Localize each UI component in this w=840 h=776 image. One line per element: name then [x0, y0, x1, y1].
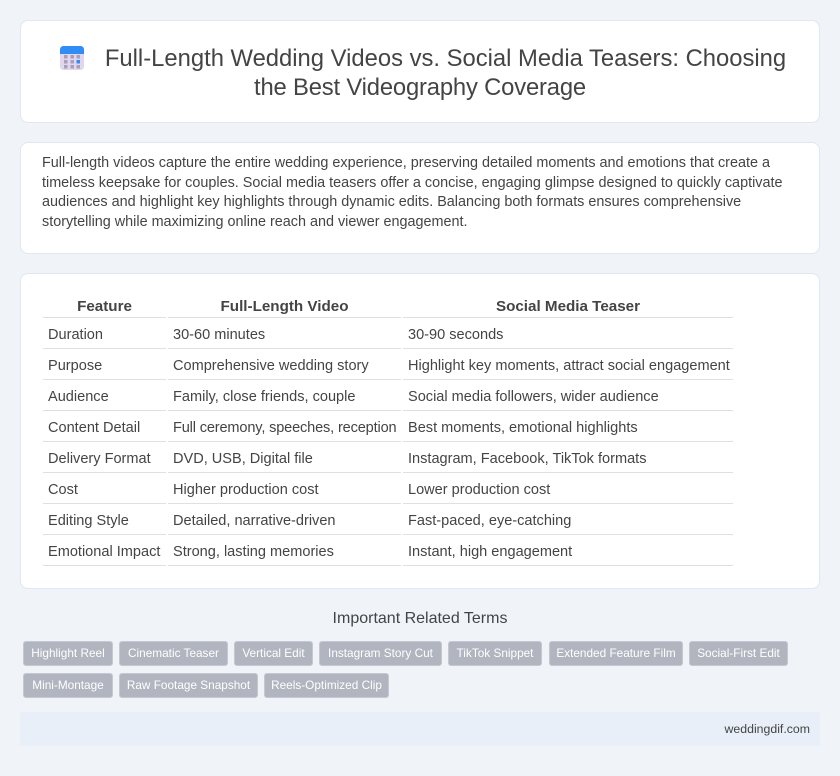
comparison table: Audience [48, 389, 109, 405]
comparison table: Detailed, narrative-driven [173, 513, 336, 529]
comparison table: Social media followers, wider audience [408, 389, 659, 405]
comparison table: Emotional Impact [48, 544, 160, 560]
related term tags: Instagram Story Cut [328, 646, 433, 660]
comparison table: Highlight key moments, attract social engagement [408, 358, 730, 374]
related term tags: Extended Feature Film [556, 646, 676, 660]
intro text: storytelling while maximizing online reach and viewer engagement. [42, 214, 468, 230]
related term tags: Mini-Montage [32, 678, 104, 692]
comparison table: Full ceremony, speeches, reception [173, 420, 396, 436]
comparison table: Feature [77, 298, 132, 315]
intro text [42, 155, 782, 230]
comparison table: 30-60 minutes [173, 327, 265, 343]
intro text: Full-length videos capture the entire wedding experience, preserving detailed moments and emotions that create a [42, 155, 770, 171]
comparison table: Lower production cost [408, 482, 550, 498]
icon: calendar [60, 46, 84, 70]
intro text: audiences and highlight key highlights through dynamic edits. Balancing both formats ensures comprehensive [42, 194, 741, 210]
related term tags: Highlight Reel [31, 646, 105, 660]
comparison table: Best moments, emotional highlights [408, 420, 638, 436]
related term tags [23, 641, 788, 698]
comparison table: Content Detail [48, 420, 140, 436]
comparison table: Delivery Format [48, 451, 151, 467]
comparison table: Comprehensive wedding story [173, 358, 369, 374]
comparison table: Instant, high engagement [408, 544, 572, 560]
comparison table: 30-90 seconds [408, 327, 503, 343]
comparison table: DVD, USB, Digital file [173, 451, 313, 467]
comparison table: Higher production cost [173, 482, 319, 498]
related term tags: TikTok Snippet [457, 646, 533, 660]
related term tags: Social-First Edit [697, 646, 780, 660]
related term tags: Reels-Optimized Clip [271, 678, 382, 692]
comparison table: Family, close friends, couple [173, 389, 355, 405]
title [105, 45, 786, 101]
intro panel [20, 142, 820, 254]
title: Full-Length Wedding Videos vs. Social Media Teasers: Choosing [105, 45, 786, 72]
comparison table: Editing Style [48, 513, 129, 529]
comparison table: Instagram, Facebook, TikTok formats [408, 451, 646, 467]
comparison table: Purpose [48, 358, 102, 374]
comparison table: Duration [48, 327, 103, 343]
related term tags: Cinematic Teaser [128, 646, 219, 660]
comparison table: Full-Length Video [221, 298, 348, 315]
table panel [20, 273, 820, 589]
comparison table: Strong, lasting memories [173, 544, 334, 560]
related term tags: Raw Footage Snapshot [127, 678, 250, 692]
comparison table: Fast-paced, eye-catching [408, 513, 571, 529]
related term tags: Vertical Edit [242, 646, 305, 660]
header panel [20, 20, 820, 123]
related terms heading: Important Related Terms [333, 610, 507, 627]
title: the Best Videography Coverage [254, 74, 586, 101]
intro text: timeless keepsake for couples. Social media teasers offer a concise, engaging glimpse designed to quickly captivate [42, 174, 782, 190]
comparison table: Cost [48, 482, 78, 498]
footer source text: weddingdif.com [725, 722, 810, 736]
comparison table: Social Media Teaser [496, 298, 640, 315]
footer bar [20, 712, 820, 746]
comparison table [43, 298, 733, 566]
